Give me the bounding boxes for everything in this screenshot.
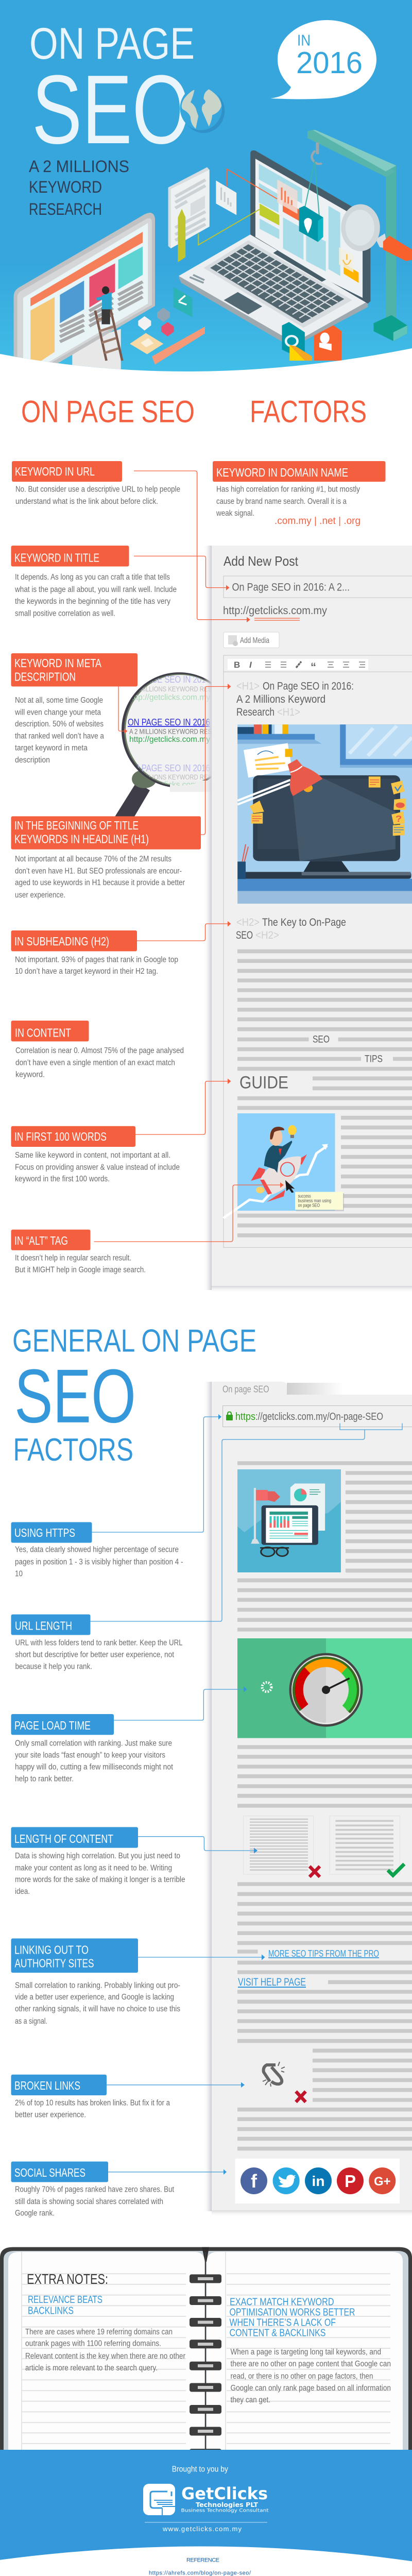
factor: in content: IN CONTENT (15, 1026, 71, 1040)
factor: length of content: Data is showing high correlation. But you just need to (15, 1852, 180, 1860)
address bar: https (235, 1411, 255, 1422)
factor: in content: keyword. (15, 1071, 45, 1079)
factor: social shares (11, 2162, 175, 2218)
factor: in the beginning of title: Not important at all because 70% of the 2M results (15, 855, 171, 863)
factor: keyword in meta description: target keyword in meta (15, 744, 88, 753)
inline keywords (239, 1035, 383, 1092)
factor: in the beginning of title: don’t even have H1. But SEO professionals are encour- (15, 867, 182, 876)
h2 text (236, 917, 346, 941)
factor: url length: URL LENGTH (15, 1619, 72, 1632)
note: right page: there are no other on page content that Google can (231, 2360, 391, 2368)
speech bubble: in 2016: IN (297, 31, 311, 49)
factor: broken links: BROKEN LINKS (14, 2079, 80, 2092)
factor: page load time: PAGE LOAD TIME (14, 1719, 91, 1732)
alt tooltip: on page SEO (298, 1202, 320, 1209)
note: left page: Relevant content is the key when there are no other (25, 2352, 185, 2361)
editor toolbar: B (234, 660, 240, 670)
factor: keyword in url: No. But consider use a descriptive URL to help people (15, 485, 180, 494)
illustration: monitor, laptop and crane (14, 130, 412, 391)
factor: in subheading (11, 930, 178, 976)
factor: keyword in meta description: will even change your meta (14, 708, 101, 717)
title: on page seo: SEO (32, 55, 191, 164)
editor box (224, 655, 412, 1247)
note: right page: Google can only rank page based on all information (231, 2384, 391, 2393)
browser tab: On page SEO (222, 1384, 269, 1395)
factor: social shares: SOCIAL SHARES (14, 2166, 85, 2179)
factor: broken links (11, 2075, 170, 2119)
logo: getclicks: Business Technology Consultant (181, 2509, 269, 2514)
inline keywords: GUIDE (239, 1073, 288, 1092)
heading: general on page seo factors (12, 1324, 256, 1468)
search result snippets in lens: ON PAGE SEO IN 2016 (128, 763, 210, 773)
factor: keyword in domain name: cause by brand name search. Overall it is a (216, 497, 347, 506)
title input (224, 576, 412, 598)
subtitle: A 2 MILLIONS (29, 157, 129, 176)
factor: keyword in title: small positive correlation as well. (15, 609, 115, 618)
person on ladder (95, 286, 122, 361)
factor: using https (11, 1522, 183, 1578)
authority links (238, 1948, 379, 1988)
note: right page: OPTIMISATION WORKS BETTER (230, 2307, 355, 2318)
authority links: VISIT HELP PAGE (238, 1976, 306, 1988)
search result snippets in lens: http://getclicks.com.my (129, 735, 210, 744)
monitor (13, 213, 155, 369)
factor: linking out to authority sites: vide a better user experience, and Google is lacking (15, 1993, 174, 2002)
factor: length of content: idea. (15, 1887, 30, 1896)
website: www.getclicks.com.my (162, 2525, 242, 2533)
factor: in the beginning of title: KEYWORDS IN HEADLINE (H1) (14, 833, 149, 846)
speech bubble: in 2016: 2016 (296, 46, 363, 80)
arrow: url length to url bracket (91, 1423, 402, 1621)
inline keywords: TIPS (365, 1054, 383, 1065)
subtitle (29, 157, 129, 218)
arrow: social shares to icons (108, 2169, 227, 2175)
factor: in the beginning of title: aged to use keywords in H1 because it provide a better (15, 878, 185, 887)
factor: in content: don’t have even a single mention of an exact match (15, 1058, 175, 1067)
logo: getclicks: Technologies PLT (196, 2501, 259, 2509)
factor: keyword in url (12, 461, 180, 506)
add new post heading: Add New Post (224, 553, 299, 569)
note: right page (230, 2297, 391, 2404)
factor: keyword in meta description: KEYWORD IN META (14, 656, 102, 670)
heading: general on page seo factors: FACTORS (13, 1432, 133, 1468)
factor: linking out to authority sites (11, 1938, 180, 2026)
speech bubble: in 2016 (270, 20, 376, 99)
h2 text: SEO (236, 929, 253, 941)
factor: length of content: more words for the sake of making it longer is a terrible (15, 1875, 185, 1884)
h1 text (236, 680, 354, 718)
factor: page load time: Only small correlation with ranking. Just make sure (15, 1739, 172, 1748)
arrow: subheading to h2 (137, 921, 231, 941)
h2 text: The Key to On-Page (262, 917, 346, 928)
factor: keyword in domain name: Has high correlation for ranking #1, but mostly (216, 485, 360, 494)
heading: general on page seo factors: GENERAL ON PAGE (12, 1324, 256, 1359)
subtitle: KEYWORD (29, 178, 102, 196)
add media button: Add Media (240, 636, 269, 645)
factor: keyword in meta description: description (15, 756, 50, 765)
factor: page load time (11, 1714, 174, 1784)
search result snippets in lens (128, 674, 212, 789)
icon: broken link (263, 2062, 306, 2102)
factor: in first 100 words: Same like keyword in content, not important at all. (15, 1151, 170, 1160)
alt tooltip: business man using (298, 1198, 331, 1204)
factor: using https: USING HTTPS (14, 1526, 75, 1539)
factor: in content (11, 1021, 184, 1079)
factor: in first 100 words: IN FIRST 100 WORDS (14, 1130, 107, 1143)
search result snippets in lens: A 2 MILLIONS KEYWORD RES (129, 773, 212, 781)
factor: url length: because it help you rank. (15, 1662, 92, 1671)
document and connectors (168, 167, 277, 262)
factor: in the beginning of title: user experience. (15, 891, 65, 900)
body copy placeholder lines (237, 951, 412, 1235)
note: left page: There are cases where 19 referring domains can (25, 2328, 173, 2336)
subtitle: RESEARCH (29, 200, 102, 218)
magnifier over search result (115, 672, 211, 816)
factor: length of content: make your content as long as it need to be. Writing (15, 1863, 172, 1872)
icon: google plus (369, 2167, 396, 2194)
illustration: rocket businessman (224, 1113, 335, 1218)
arrow: page load to gauge (114, 1687, 247, 1720)
search result snippets in lens: ON PAGE SEO IN 2016 (128, 674, 210, 685)
editor toolbar (228, 659, 368, 673)
notebook: extra notes (0, 2247, 412, 2458)
factor: in the beginning of title: IN THE BEGINNING OF TITLE (14, 819, 139, 832)
illustration: speed gauge (237, 1638, 412, 1738)
factor: keyword in url: understand what is the link about before click. (15, 497, 158, 506)
factor: page load time: happy will do, cutting a few milliseconds might not (15, 1762, 174, 1771)
cubes and tiles (130, 287, 341, 365)
h2 text: <H2> (236, 917, 260, 928)
logo: getclicks: GetClicks (181, 2484, 268, 2503)
gear and bubble tiles (282, 322, 312, 361)
title: on page seo: ON PAGE (29, 19, 195, 69)
title: on page seo (29, 19, 195, 164)
long vs short content thumbnails (243, 1816, 404, 1877)
factor: in the beginning of title (11, 816, 201, 900)
permalink: http://getclicks.com.my (223, 605, 327, 617)
factor: in subheading: Not important. 93% of pages that rank in Google top (15, 955, 178, 964)
factor: in first 100 words (11, 1126, 180, 1183)
arrow: meta to result (118, 686, 128, 734)
factor: linking out to authority sites: other ranking signals, it will have no choice to use this (15, 2005, 180, 2013)
factor: using https: 10 (15, 1569, 23, 1578)
social share box (235, 2159, 400, 2204)
heading: general on page seo factors: SEO (14, 1354, 136, 1439)
factor: keyword in domain name: .com.my | .net | .org (274, 516, 360, 527)
factor: length of content (11, 1827, 185, 1896)
illustration: desk with monitor and lamp: ? (396, 814, 402, 824)
factor: social shares: Google rank. (15, 2209, 55, 2218)
factor: in content: Correlation is near 0. Almost 75% of the page analysed (15, 1046, 184, 1055)
factor: url length (11, 1615, 183, 1671)
panel: browser page (203, 1382, 412, 2216)
factor: keyword in meta description: DESCRIPTION (14, 670, 76, 683)
brought to you by: Brought to you by (172, 2465, 228, 2473)
icon: facebook (241, 2167, 267, 2194)
factor: in subheading: IN SUBHEADING (H2) (14, 935, 109, 948)
factor: keyword in meta description (11, 653, 138, 765)
laptop (179, 150, 370, 347)
search result snippets in lens: A 2 MILLIONS KEYWORD RES (129, 685, 212, 693)
illustration: tablet and flag (237, 1469, 341, 1572)
factor: keyword in meta description: that ranked well don’t have a (15, 732, 104, 741)
search result snippets in lens: A 2 MILLIONS KEYWORD RES (129, 727, 212, 736)
arrow: url to permalink (134, 471, 250, 622)
icon: facebook: f (251, 2171, 258, 2192)
factor: keyword in meta description: Not at all, some time Google (15, 696, 103, 705)
icon: twitter (273, 2167, 300, 2194)
inline keywords: SEO (313, 1035, 330, 1045)
icon: linkedin (305, 2167, 332, 2194)
header banner (0, 0, 412, 391)
factor: url length: short but descriptive for better user experience, not (15, 1651, 175, 1659)
search result snippets in lens: ON PAGE SEO IN 2016 (128, 717, 210, 727)
spiral rings (190, 2274, 221, 2458)
factor: in first 100 words: keyword in the first 100 words. (15, 1175, 110, 1183)
factor: in alt tag (11, 1230, 146, 1275)
factor: keyword in title: the keywords in the beginning of the title has very (15, 597, 170, 606)
note: left page: RELEVANCE BEATS (28, 2294, 102, 2306)
h2 text: <H2> (255, 929, 279, 941)
factor: keyword in title: It depends. As long as you can craft a title that tells (15, 573, 170, 582)
factor: broken links: better user experience. (15, 2110, 86, 2119)
note: right page: CONTENT & BACKLINKS (230, 2328, 325, 2339)
factor: keyword in meta description: description. 50% of websites (15, 720, 104, 728)
h1 text: A 2 Millions Keyword (236, 693, 325, 705)
logo: getclicks (143, 2484, 269, 2515)
note: right page: they can get. (231, 2396, 270, 2404)
arrow: title to title input (134, 556, 230, 590)
icon: pinterest (337, 2167, 364, 2194)
footer band (0, 2450, 412, 2561)
icon: red cross (310, 1866, 320, 1877)
authority links: MORE SEO TIPS FROM THE PRO (268, 1948, 379, 1959)
add media button (224, 632, 279, 648)
heading: on page seo factors: ON PAGE SEO (21, 395, 195, 429)
factor: linking out to authority sites: as a signal. (15, 2017, 47, 2026)
factor: in first 100 words: Focus on providing answer & value instead of include (15, 1163, 180, 1172)
arrow: h1 label to heading (201, 684, 231, 835)
crane (299, 130, 407, 341)
note: right page: EXACT MATCH KEYWORD (230, 2297, 334, 2308)
factor: keyword in url: KEYWORD IN URL (15, 465, 95, 478)
factor: in alt tag: IN “ALT” TAG (14, 1234, 68, 1247)
reference block (149, 2557, 251, 2576)
factor: keyword in domain name: weak signal. (216, 509, 254, 518)
arrow: linking out to link (138, 1955, 265, 1960)
note: right page: read, or there is no other on page factors, then (231, 2372, 373, 2381)
factor: linking out to authority sites: Small correlation to ranking. Probably linking out pro- (15, 1981, 180, 1990)
alt tooltip: success (298, 1193, 311, 1199)
arrow: length of content to thumbnail (138, 1837, 258, 1854)
factor: in alt tag: But it MIGHT help in Google image search. (15, 1266, 146, 1275)
note: right page: WHEN THERE’S A LACK OF (230, 2317, 336, 2328)
editor toolbar: “ (311, 660, 316, 673)
factor: linking out to authority sites: AUTHORITY SITES (14, 1956, 94, 1970)
arrow: broken links to icon (107, 2082, 245, 2088)
magnifier (341, 204, 412, 261)
factor: keyword in title: what is the page all about, you will rank well. Include (14, 585, 177, 594)
factor: keyword in title: KEYWORD IN TITLE (14, 551, 99, 565)
factor: social shares: still data is showing social shares correlated with (15, 2197, 163, 2206)
factor: keyword in domain name: KEYWORD IN DOMAIN NAME (216, 466, 348, 479)
factor: keyword in domain name (213, 461, 385, 527)
address bar: ://getclicks.com.my/On-page-SEO (255, 1411, 383, 1422)
factor: length of content: LENGTH OF CONTENT (14, 1832, 113, 1845)
factor: in alt tag: It doesn’t help in regular search result. (15, 1253, 131, 1262)
icon: google plus: G+ (374, 2175, 391, 2189)
heading: on page seo factors: FACTORS (250, 395, 367, 429)
reference block: REFERENCE (186, 2557, 219, 2564)
h1 text: <H1> (277, 706, 300, 718)
factor: linking out to authority sites: LINKING OUT TO (14, 1943, 89, 1956)
address bar (223, 1405, 412, 1427)
icon: globe (180, 86, 225, 133)
note: left page: EXTRA NOTES: (27, 2271, 108, 2287)
alt tooltip (295, 1192, 344, 1211)
arrow: first 100 words to guide (135, 1079, 231, 1134)
icon: green check (388, 1864, 404, 1875)
factor: url length: URL with less folders tend to rank better. Keep the URL (15, 1638, 183, 1647)
illustration: desk with monitor and lamp (237, 724, 412, 904)
factor: page load time: help to rank better. (15, 1775, 74, 1784)
icon: pinterest: P (345, 2172, 356, 2191)
factor: using https: pages in position 1 - 3 is visibly higher than position 4 - (15, 1558, 183, 1567)
title input: On Page SEO in 2016: A 2... (232, 581, 350, 593)
icon: red cross (296, 2092, 306, 2102)
factor: keyword in title (11, 546, 177, 618)
note: left page: article is more relevant to the search query. (25, 2364, 158, 2372)
note: right page: When a page is targeting long tail keywords, and (231, 2348, 381, 2357)
factor: in subheading: 10 don’t have a target keyword in their H2 tag. (15, 967, 158, 976)
editor toolbar: I (249, 660, 252, 670)
icon: linkedin: in (312, 2173, 324, 2189)
browser tab (212, 1382, 287, 1395)
note: left page: BACKLINKS (28, 2306, 74, 2317)
placeholder lines (237, 1463, 412, 2148)
heading: on page seo factors (21, 395, 367, 429)
h1 text: <H1> (236, 680, 260, 692)
arrow: https to address bar (92, 1414, 221, 1532)
h1 text: On Page SEO in 2016: (263, 680, 354, 692)
factor: broken links: 2% of top 10 results has broken links. But fix it for a (15, 2099, 170, 2108)
arrow: alt tag to image (94, 1182, 284, 1242)
h1 text: Research (236, 706, 274, 718)
factor: social shares: Roughly 70% of pages ranked have zero shares. But (15, 2185, 175, 2194)
factor: using https: Yes, data clearly showed higher percentage of secure (15, 1546, 179, 1554)
note: left page: outrank pages with 1100 referring domains. (25, 2340, 161, 2348)
factor: page load time: your site loads “fast enough” to keep your visitors (15, 1751, 165, 1760)
search result snippets in lens: http://getclicks.com.my (129, 693, 210, 702)
panel: wordpress post editor (203, 546, 412, 1293)
note: left page (25, 2271, 185, 2372)
search result snippets in lens: http://getclicks.com.my (129, 781, 210, 789)
